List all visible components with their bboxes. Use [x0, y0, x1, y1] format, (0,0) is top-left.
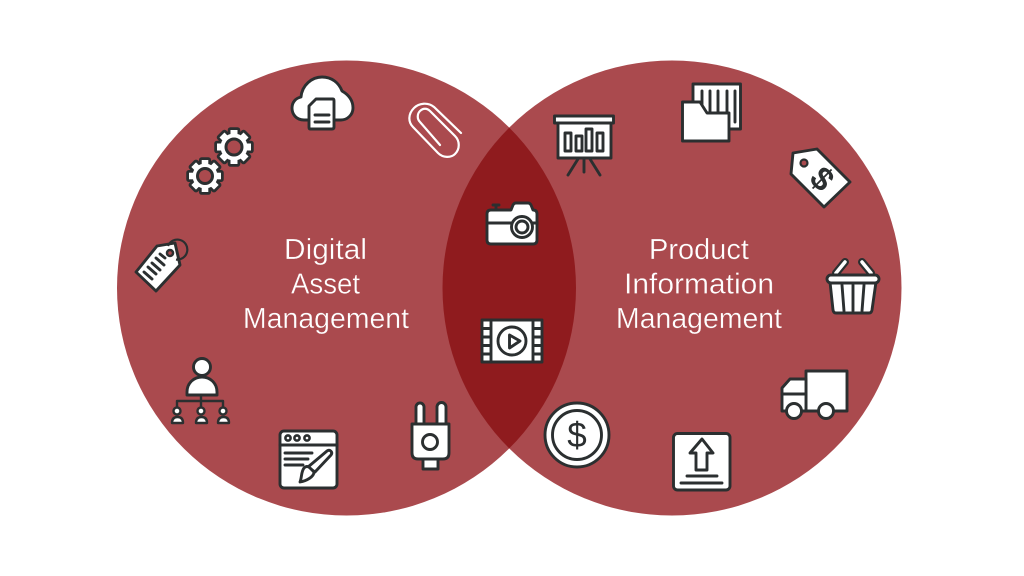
heading: Digital Asset Management: Management — [243, 303, 409, 335]
icon: dollar coin: $ — [567, 416, 587, 455]
heading: Digital Asset Management: Asset — [291, 268, 360, 300]
icon: film strip with play button — [482, 320, 542, 362]
icon: camera — [487, 203, 537, 244]
icon: upload box — [674, 434, 730, 490]
icon: folder with barcode — [682, 84, 740, 141]
heading: Digital Asset Management: Digital — [284, 234, 367, 266]
overlap region — [442, 128, 576, 448]
icon: delivery truck — [782, 371, 847, 418]
icon: dollar coin — [545, 403, 609, 467]
icon: cloud document — [292, 77, 353, 129]
icon: dollar price tag: $ — [803, 159, 842, 198]
heading: Product Information Management: Product — [649, 234, 749, 266]
venn diagram — [117, 60, 902, 516]
icon: presentation board — [554, 116, 614, 175]
icon: browser with paintbrush — [280, 431, 337, 488]
heading: Product Information Management: Management — [616, 303, 782, 335]
heading: Digital Asset Management — [243, 234, 409, 335]
icon: plug — [412, 402, 449, 469]
heading: Product Information Management — [616, 234, 782, 335]
small gear — [189, 160, 221, 192]
heading: Product Information Management: Information — [624, 268, 774, 300]
icon: shopping basket — [827, 262, 879, 313]
large gear — [217, 130, 251, 164]
circle: product information management — [442, 60, 902, 516]
icon: price tag with lines — [136, 240, 187, 291]
icon: gears — [189, 130, 251, 192]
icon: paperclip — [409, 104, 461, 157]
icon: organisation hierarchy — [172, 358, 229, 423]
circle: digital asset management — [117, 60, 576, 516]
icon: dollar price tag — [791, 149, 850, 207]
